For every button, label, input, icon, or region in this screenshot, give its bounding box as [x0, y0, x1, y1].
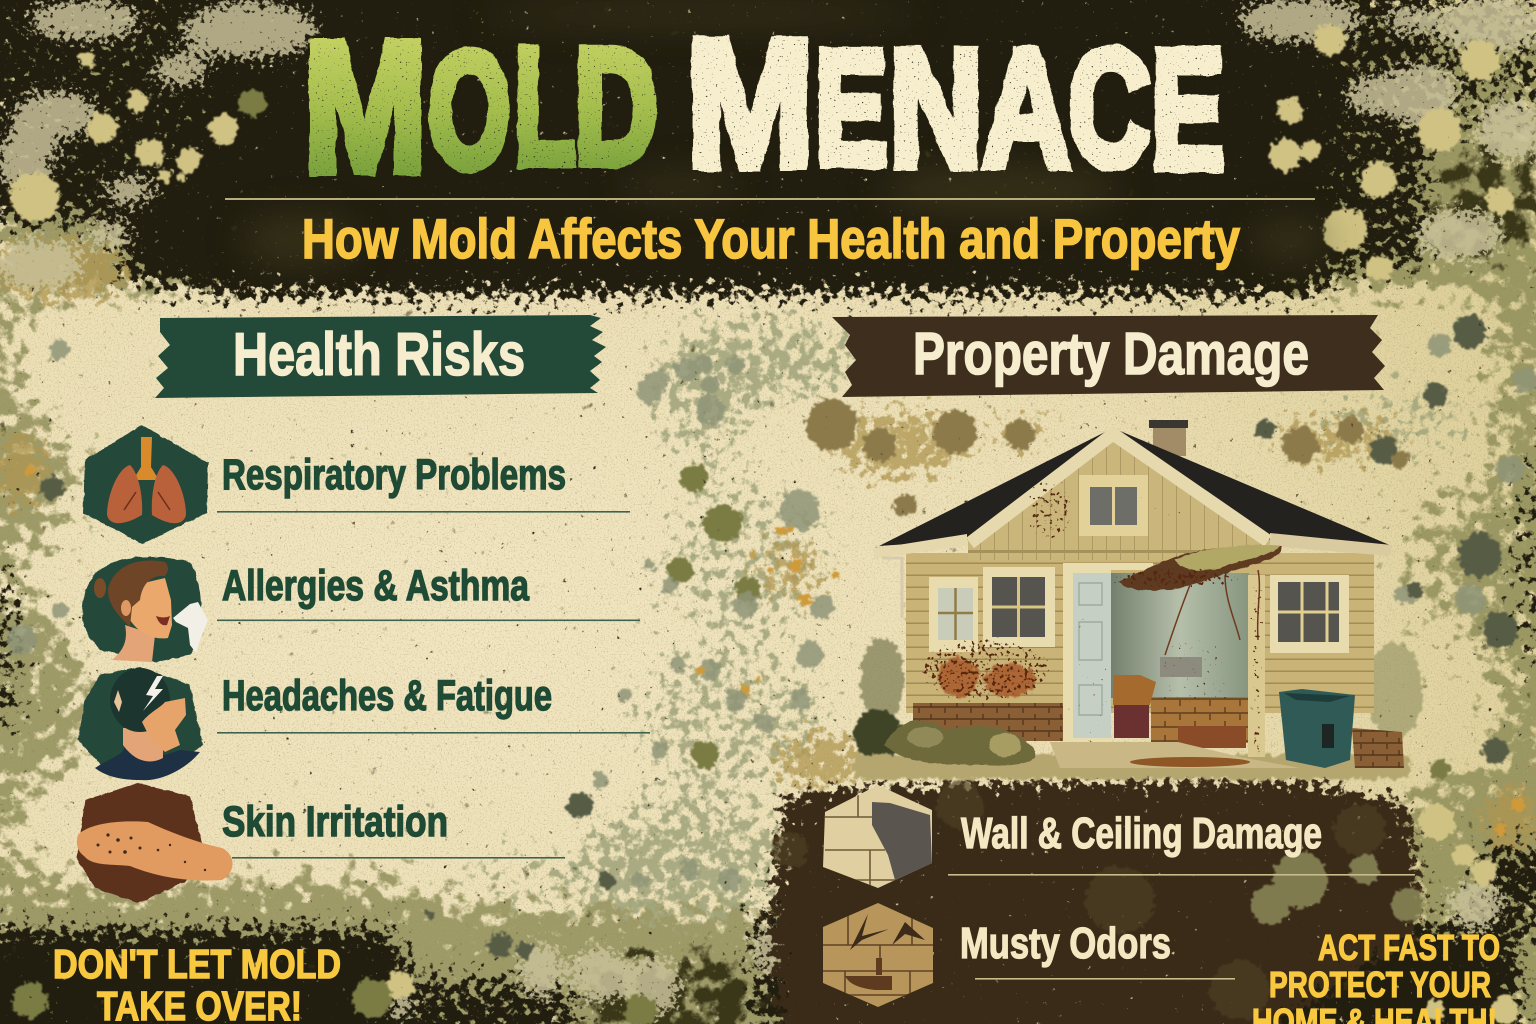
divider	[217, 732, 650, 734]
item: Respiratory Problems: Respiratory Problems	[222, 451, 566, 499]
title: Mold Menace: L	[514, 12, 576, 200]
moss highlight	[1175, 545, 1280, 570]
icon: cracked wall	[823, 785, 932, 888]
title: Mold Menace: O	[428, 18, 511, 201]
panel: health risks list	[77, 425, 650, 903]
divider	[975, 978, 1235, 980]
illustration: moldy house	[854, 420, 1423, 779]
stacked bricks	[1352, 728, 1404, 768]
eaves	[873, 533, 1392, 558]
title: Mold Menace: E	[1151, 15, 1225, 205]
icon: musty odors	[823, 903, 933, 1007]
rust vines	[1165, 570, 1259, 655]
item: Headaches & Fatigue: Headaches & Fatigue	[222, 672, 552, 720]
title: Mold Menace: E	[815, 16, 887, 199]
rust stains	[938, 657, 1036, 697]
title: Mold Menace: D	[574, 15, 658, 200]
house body	[906, 440, 1374, 713]
panel heading: Health Risks: Health Risks	[233, 321, 525, 388]
planter	[1178, 726, 1246, 748]
divider	[217, 511, 630, 513]
divider	[232, 857, 565, 859]
gable trim	[970, 434, 1268, 543]
icon: person sneezing	[82, 557, 208, 662]
title: Mold Menace: M	[303, 4, 427, 211]
panel heading: Property Damage	[832, 315, 1385, 397]
rust speckles on house	[890, 476, 1264, 767]
downspout	[882, 558, 902, 618]
dark header mottling	[240, 2, 1330, 265]
roof	[879, 428, 1392, 546]
item: Musty Odors: Musty Odors	[960, 919, 1171, 968]
brown area mottling	[772, 781, 1455, 1020]
ground and bushes	[854, 638, 1423, 779]
title: Mold Menace: A	[982, 14, 1071, 202]
chimney	[1149, 420, 1188, 456]
divider	[217, 620, 640, 621]
interior brick	[1151, 697, 1248, 743]
door header	[1063, 563, 1153, 570]
icon: skin irritation arm	[77, 783, 232, 903]
dormer window	[1079, 475, 1148, 536]
brown lower-right area	[770, 780, 1425, 1024]
brick foundation	[913, 703, 1063, 741]
callout: don't let mold take over	[53, 941, 341, 1024]
doorstep	[1050, 742, 1300, 768]
left window	[929, 577, 978, 652]
panel: property damage list	[823, 785, 1415, 1007]
water tank	[1279, 689, 1355, 768]
door	[1063, 563, 1111, 743]
title: Mold Menace: M	[686, 1, 814, 205]
mossy collapsed awning	[1118, 546, 1282, 591]
rust puddle	[1130, 757, 1250, 767]
header rule	[225, 198, 1315, 200]
item: Skin Irritation: Skin Irritation	[222, 798, 448, 846]
title: Mold Menace: C	[1068, 16, 1150, 201]
title: Mold Menace: N	[889, 14, 983, 202]
divider	[948, 874, 1415, 876]
alcove interior	[1111, 573, 1249, 698]
icon: person with headache	[78, 667, 203, 780]
right window	[1270, 575, 1349, 653]
panel heading: Health Risks	[155, 315, 606, 398]
panel heading: Property Damage: Property Damage	[913, 321, 1309, 387]
title: Mold Menace	[303, 1, 1225, 211]
callout: don't let mold take over: DON'T LET MOLD	[53, 941, 341, 987]
icon: lungs	[83, 425, 208, 544]
callout: act fast	[1252, 927, 1500, 1024]
item: Wall & Ceiling Damage: Wall & Ceiling Damage	[961, 809, 1322, 858]
debris pile	[885, 720, 1036, 766]
subtitle: How Mold Affects Your Health and Property	[302, 207, 1240, 270]
bench	[1113, 675, 1156, 738]
interior sign	[1160, 657, 1202, 677]
right column	[1248, 575, 1265, 757]
item: Allergies & Asthma: Allergies & Asthma	[222, 562, 530, 610]
centre window	[983, 567, 1055, 647]
